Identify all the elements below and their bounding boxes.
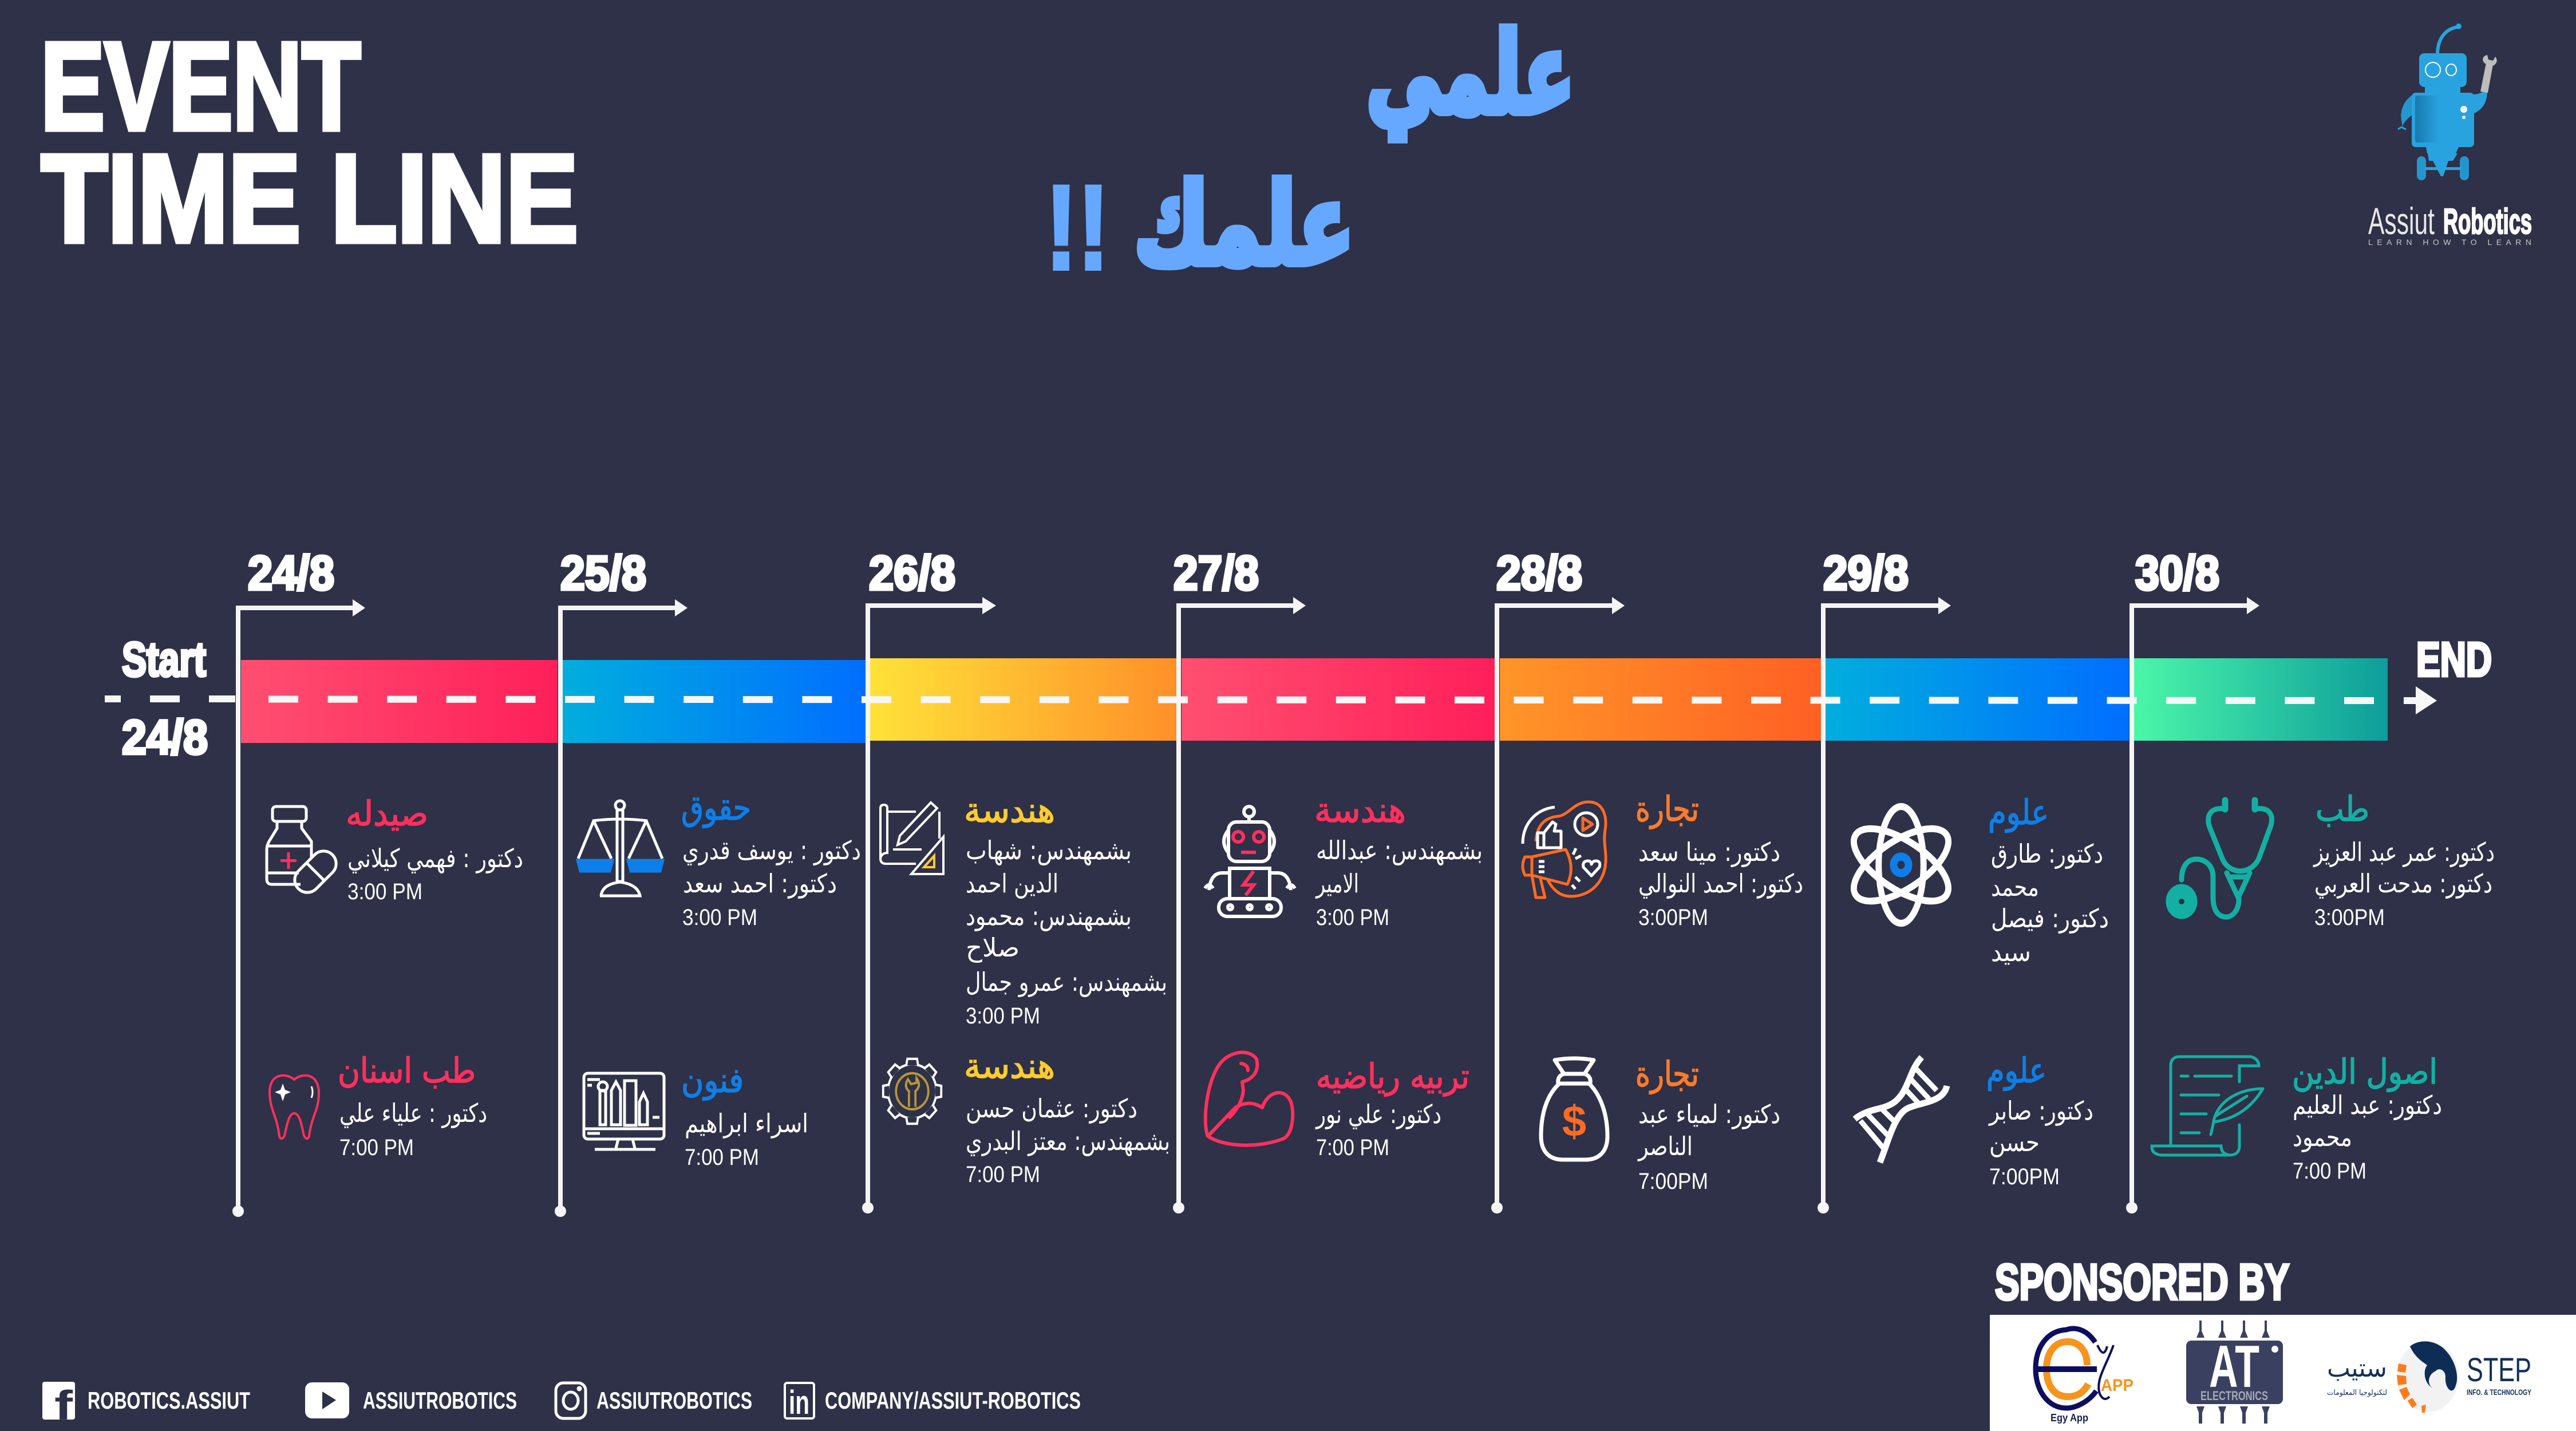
logo: AT Electronics: AT (2209, 1334, 2259, 1400)
panel: science session 1 (1844, 793, 2109, 967)
time: 7:00 PM (966, 1162, 1040, 1187)
slogan (1045, 9, 1575, 295)
time: 7:00 PM (685, 1145, 759, 1170)
speakers: بشمهندس: شهاب (966, 835, 1132, 865)
facebook handle: ROBOTICS.ASSIUT (88, 1387, 250, 1414)
date labels: 30/8 (2135, 546, 2219, 600)
logo: Egy App (2036, 1329, 2134, 1424)
time: 7:00 PM (339, 1135, 414, 1160)
speakers (1638, 837, 1803, 899)
speakers (682, 835, 861, 899)
date labels: 28/8 (1496, 546, 1582, 600)
logo wordmark: LEARN HOW TO LEARN (2368, 238, 2531, 247)
time: 3:00PM (2314, 905, 2385, 930)
icon: money bag (1541, 1058, 1607, 1160)
date labels: 27/8 (1174, 546, 1259, 600)
speakers: بشمهندس: معتز البدري (966, 1126, 1170, 1156)
panel: dentistry session (270, 1051, 487, 1160)
start label: Start (122, 633, 206, 686)
speakers: بشمهندس: عبدالله (1316, 835, 1483, 865)
panel: pharmacy session (267, 794, 523, 904)
speakers: دكتور: عثمان حسن (966, 1093, 1137, 1124)
slogan: علمي (1366, 9, 1575, 140)
time: 7:00 PM (2293, 1159, 2366, 1184)
speakers: دكتور : يوسف قدري (682, 835, 861, 865)
speakers: دكتور: احمد سعد (683, 868, 837, 899)
panel: engineering session 1 (880, 790, 1167, 1029)
panel: arts session (584, 1061, 808, 1170)
heading: فنون (681, 1061, 744, 1101)
panel: commerce session 1 (1523, 789, 1803, 930)
speakers: محمود (2293, 1122, 2352, 1152)
icon: scales (578, 801, 663, 896)
time: 3:00 PM (966, 1003, 1040, 1029)
logo: AT Electronics: ELECTRONICS (2200, 1389, 2268, 1403)
speakers: الدين احمد (966, 868, 1058, 899)
panel: physical education session (1206, 1053, 1469, 1160)
speakers: سيد (1991, 937, 2031, 967)
speakers: دكتور : علياء علي (339, 1098, 487, 1128)
speakers: دكتور : فهمي كيلاني (347, 843, 523, 873)
icon: monitor with art tools (584, 1073, 664, 1149)
logo wordmark (2368, 200, 2532, 247)
heading: هندسة (964, 790, 1055, 831)
speakers: حسن (1989, 1127, 2040, 1157)
title: TIME LINE (41, 129, 578, 268)
timeline bar (241, 658, 2388, 743)
panel: medicine session (2168, 789, 2495, 930)
heading: علوم (1988, 793, 2049, 833)
icon: money bag: $ (1562, 1097, 1586, 1146)
icon: medicine bottle and pill (267, 807, 341, 898)
logo: Egy App: Egy App (2050, 1412, 2088, 1424)
speakers: اسراء ابراهيم (685, 1108, 808, 1139)
logo: Assiut Robotics (2368, 23, 2532, 247)
logo: STEP: ستيب (2327, 1354, 2387, 1383)
date labels: 24/8 (248, 546, 334, 600)
icon: atom (1844, 807, 1958, 923)
slogan: !! (1045, 160, 1109, 295)
logo: STEP: STEP (2467, 1351, 2531, 1389)
panel: commerce session 2 (1541, 1054, 1780, 1194)
panel: sponsors (1990, 1315, 2576, 1431)
icon: DNA helix (1855, 1057, 1947, 1163)
heading: طب (2316, 789, 2369, 829)
icon: blueprint and pencil (880, 803, 943, 874)
icon: gear with wrench (883, 1059, 941, 1124)
logo: STEP (2327, 1341, 2531, 1413)
speakers: دكتور: عمر عبد العزيز (2313, 837, 2495, 867)
speakers (966, 1093, 1170, 1156)
heading: تجارة (1635, 1054, 1699, 1094)
logo: Egy App: APP (2101, 1376, 2134, 1395)
speakers: دكتور: فيصل (1991, 903, 2109, 934)
end label: END (2416, 633, 2492, 686)
speakers: دكتور: علي نور (1315, 1099, 1441, 1129)
time: 7:00 PM (1316, 1135, 1389, 1160)
speakers: دكتور: لمياء عبد (1638, 1099, 1780, 1129)
speakers: دكتور: مدحت العربي (2314, 868, 2492, 899)
heading: صيدله (346, 794, 428, 834)
speakers: بشمهندس: عمرو جمال (966, 967, 1167, 998)
heading: هندسة (1314, 790, 1406, 831)
title: EVENT (41, 17, 361, 156)
icon: scroll and quill (2152, 1057, 2263, 1155)
heading: اصول الدين (2292, 1052, 2437, 1092)
start label (122, 633, 208, 764)
heading: تجارة (1635, 789, 1699, 829)
speakers (1637, 1099, 1780, 1161)
heading: هندسة (964, 1046, 1055, 1086)
speakers (1315, 835, 1483, 899)
date labels: 26/8 (869, 546, 955, 600)
icon: flexed arm (1206, 1053, 1293, 1145)
date labels (248, 546, 2219, 600)
heading: طب اسنان (338, 1051, 476, 1091)
panel: science session 2 (1855, 1051, 2093, 1189)
icon: robot mascot (2398, 23, 2497, 180)
speakers: الناصر (1637, 1131, 1693, 1161)
speakers: دكتور: طارق (1991, 839, 2103, 869)
title (41, 17, 578, 268)
speakers (966, 835, 1167, 998)
date labels: 29/8 (1823, 546, 1909, 600)
time: 7:00PM (1638, 1169, 1708, 1194)
sponsors heading: SPONSORED BY (1995, 1254, 2289, 1310)
logo: AT Electronics (2186, 1321, 2283, 1424)
panel: robotics engineering session (1205, 790, 1483, 930)
icon: tooth (270, 1076, 319, 1139)
speakers (2293, 1090, 2442, 1152)
time: 3:00 PM (1316, 905, 1389, 930)
time: 3:00 PM (682, 905, 757, 930)
speakers: محمد (1991, 872, 2039, 902)
slogan: علمك (1134, 160, 1354, 290)
speakers: دكتور: صابر (1988, 1096, 2093, 1126)
icon: youtube (305, 1382, 349, 1418)
icon: facebook: f (54, 1383, 73, 1429)
day marker lines with arrows (232, 597, 2259, 1217)
heading: حقوق (681, 788, 751, 828)
time: 7:00PM (1989, 1164, 2060, 1189)
speakers: دكتور: عبد العليم (2293, 1090, 2442, 1120)
start label: 24/8 (122, 710, 208, 764)
icon: facebook (42, 1382, 75, 1429)
icon: instagram (556, 1383, 586, 1418)
heading: تربيه رياضيه (1316, 1057, 1469, 1097)
time: 3:00PM (1638, 905, 1708, 930)
instagram handle: ASSIUTROBOTICS (596, 1387, 752, 1414)
icon: robot (1205, 807, 1295, 916)
panel: engineering session 2 (883, 1046, 1170, 1187)
icon: linkedin: in (789, 1384, 809, 1421)
panel: religion session (2152, 1052, 2442, 1184)
speakers: صلاح (966, 932, 1020, 963)
speakers (2313, 837, 2495, 899)
time: 3:00 PM (347, 879, 422, 904)
panel: law session (578, 788, 861, 930)
date labels: 25/8 (560, 546, 646, 600)
dashed center line (105, 699, 2375, 701)
social links (42, 1382, 1081, 1429)
speakers (1991, 839, 2109, 967)
speakers: بشمهندس: محمود (966, 901, 1132, 931)
end arrow (2404, 686, 2437, 714)
logo: STEP: لتكنولوجيا المعلومات (2327, 1389, 2387, 1397)
icon: stethoscope (2168, 800, 2271, 917)
logo wordmark: Assiut (2368, 200, 2435, 242)
logo: STEP: INFO. & TECHNOLOGY (2467, 1387, 2531, 1397)
speakers: دكتور: احمد النوالي (1638, 868, 1803, 899)
speakers: دكتور: مينا سعد (1638, 837, 1780, 867)
speakers (1988, 1096, 2093, 1157)
heading: علوم (1986, 1051, 2046, 1091)
linkedin handle: COMPANY/ASSIUT-ROBOTICS (825, 1387, 1081, 1414)
icon: marketing megaphone (1523, 802, 1606, 898)
speakers: الامير (1315, 868, 1359, 899)
youtube handle: ASSIUTROBOTICS (363, 1387, 517, 1414)
